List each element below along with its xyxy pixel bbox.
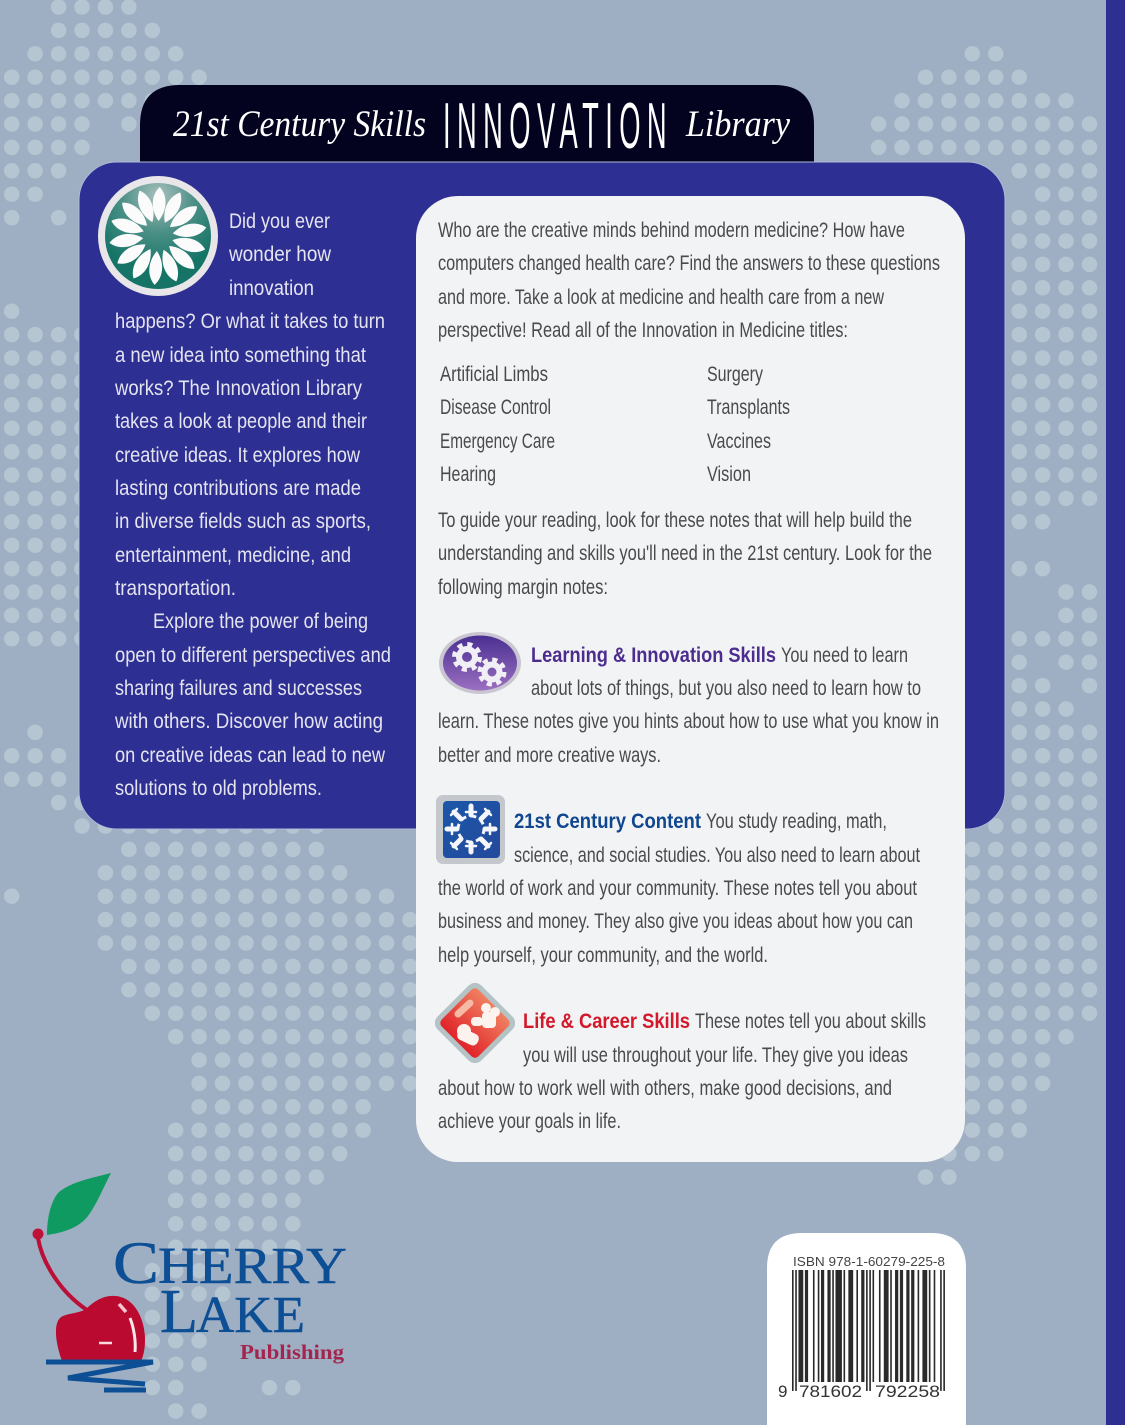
- list: medicine titles left: Artificial Limbs: [440, 363, 548, 386]
- note: 21st century content: science, and social studies. You also need to learn about: [514, 844, 920, 867]
- panel: white content card: [416, 196, 965, 1162]
- text block: reading guide: To guide your reading, look for these notes that will help build the: [438, 509, 912, 532]
- barcode card: 9: [778, 1382, 787, 1401]
- logo: cherry lake publishing: Publishing: [240, 1340, 345, 1364]
- note: learning and innovation skills: about lots of things, but you also need to learn how to: [531, 677, 921, 700]
- note: 21st century content: [438, 810, 920, 967]
- text block: intro column: Explore the power of being: [153, 610, 368, 633]
- title banner: Library: [685, 104, 791, 145]
- text block: series introduction: computers changed health care? Find the answers to these questions: [438, 252, 940, 275]
- icon: red diamond: [431, 979, 519, 1067]
- text block: intro column: takes a look at people and their: [115, 410, 367, 433]
- icon: cherry: [32, 1173, 153, 1390]
- text block: intro column: sharing failures and successes: [115, 677, 362, 700]
- list: medicine titles right: Vision: [707, 463, 751, 486]
- note: life and career skills: achieve your goals in life.: [438, 1110, 621, 1133]
- text block: intro column: with others. Discover how acting: [114, 710, 383, 733]
- note: learning and innovation skills: Learning & Innovation Skills: [531, 644, 776, 667]
- note: 21st century content: help yourself, your community, and the world.: [438, 944, 768, 967]
- text block: series introduction: [438, 219, 940, 342]
- note: 21st century content: the world of work and your community. These notes tell you about: [438, 877, 917, 900]
- list: medicine titles right: Transplants: [707, 396, 790, 419]
- list: medicine titles right: [707, 363, 790, 486]
- text block: intro column: innovation: [229, 277, 314, 300]
- right edge bar: [1106, 0, 1125, 1425]
- note: learning and innovation skills: better and more creative ways.: [438, 744, 661, 767]
- text block: intro column: solutions to old problems.: [115, 777, 322, 800]
- note: learning and innovation skills: learn. These notes give you hints about how to use what you know in: [438, 710, 939, 733]
- panel: blue backing: [79, 162, 1005, 829]
- text block: reading guide: following margin notes:: [438, 576, 608, 599]
- note: 21st century content: You study reading, math,: [706, 810, 887, 833]
- logo: cherry lake publishing: C: [113, 1230, 159, 1296]
- text block: intro column: happens? Or what it takes to turn: [115, 310, 385, 333]
- text block: intro column: in diverse fields such as sports,: [115, 510, 371, 533]
- logo: cherry lake publishing: [32, 1173, 347, 1390]
- text block: reading guide: [438, 509, 932, 599]
- text block: intro column: lasting contributions are made: [115, 477, 361, 500]
- text block: intro column: on creative ideas can lead to new: [115, 744, 386, 767]
- title banner: INNOVATION: [443, 89, 673, 162]
- note: life and career skills: [438, 1010, 926, 1133]
- text block: intro column: [114, 210, 391, 800]
- title banner: 21st Century Skills: [173, 104, 426, 145]
- note: learning and innovation skills: You need to learn: [781, 644, 908, 667]
- barcode card: 792258: [875, 1382, 940, 1401]
- text block: intro column: Did you ever: [229, 210, 330, 233]
- list: medicine titles left: [440, 363, 555, 486]
- icon: flower medallion: [98, 176, 218, 296]
- logo: cherry lake publishing: HERRY: [158, 1238, 347, 1295]
- note: life and career skills: These notes tell you about skills: [695, 1010, 926, 1033]
- text block: intro column: entertainment, medicine, and: [115, 544, 351, 567]
- text block: reading guide: understanding and skills you'll need in the 21st century. Look for the: [438, 542, 932, 565]
- barcode card: 781602: [799, 1382, 862, 1401]
- title banner: [140, 85, 814, 163]
- text block: intro column: creative ideas. It explores how: [115, 444, 361, 467]
- note: life and career skills: you will use throughout your life. They give you ideas: [523, 1044, 908, 1067]
- logo: cherry lake publishing: L: [160, 1278, 198, 1346]
- list: medicine titles left: Hearing: [440, 463, 496, 486]
- note: life and career skills: about how to work well with others, make good decisions, and: [438, 1077, 892, 1100]
- text block: intro column: transportation.: [115, 577, 236, 600]
- list: medicine titles left: Disease Control: [440, 396, 551, 419]
- logo: cherry lake publishing: AKE: [196, 1287, 305, 1344]
- text block: series introduction: Who are the creative minds behind modern medicine? How have: [438, 219, 905, 242]
- icon: blue community square: [436, 795, 505, 864]
- list: medicine titles right: Surgery: [707, 363, 763, 386]
- text block: series introduction: and more. Take a look at medicine and health care from a new: [438, 286, 885, 309]
- note: 21st century content: 21st Century Content: [514, 810, 701, 833]
- barcode card: [767, 1233, 966, 1425]
- barcode bars: [792, 1270, 945, 1391]
- text block: intro column: wonder how: [228, 243, 332, 266]
- text block: series introduction: perspective! Read all of the Innovation in Medicine titles:: [438, 319, 848, 342]
- note: 21st century content: business and money. They also give you ideas about how you can: [438, 910, 913, 933]
- icon: purple gears: [439, 632, 521, 694]
- list: medicine titles right: Vaccines: [707, 430, 771, 453]
- text block: intro column: works? The Innovation Library: [114, 377, 362, 400]
- text block: intro column: a new idea into something that: [115, 344, 366, 367]
- barcode card: ISBN 978-1-60279-225-8: [793, 1254, 945, 1269]
- text block: intro column: open to different perspectives and: [115, 644, 391, 667]
- list: medicine titles left: Emergency Care: [440, 430, 555, 453]
- note: learning and innovation skills: [438, 644, 939, 767]
- note: life and career skills: Life & Career Skills: [523, 1010, 690, 1033]
